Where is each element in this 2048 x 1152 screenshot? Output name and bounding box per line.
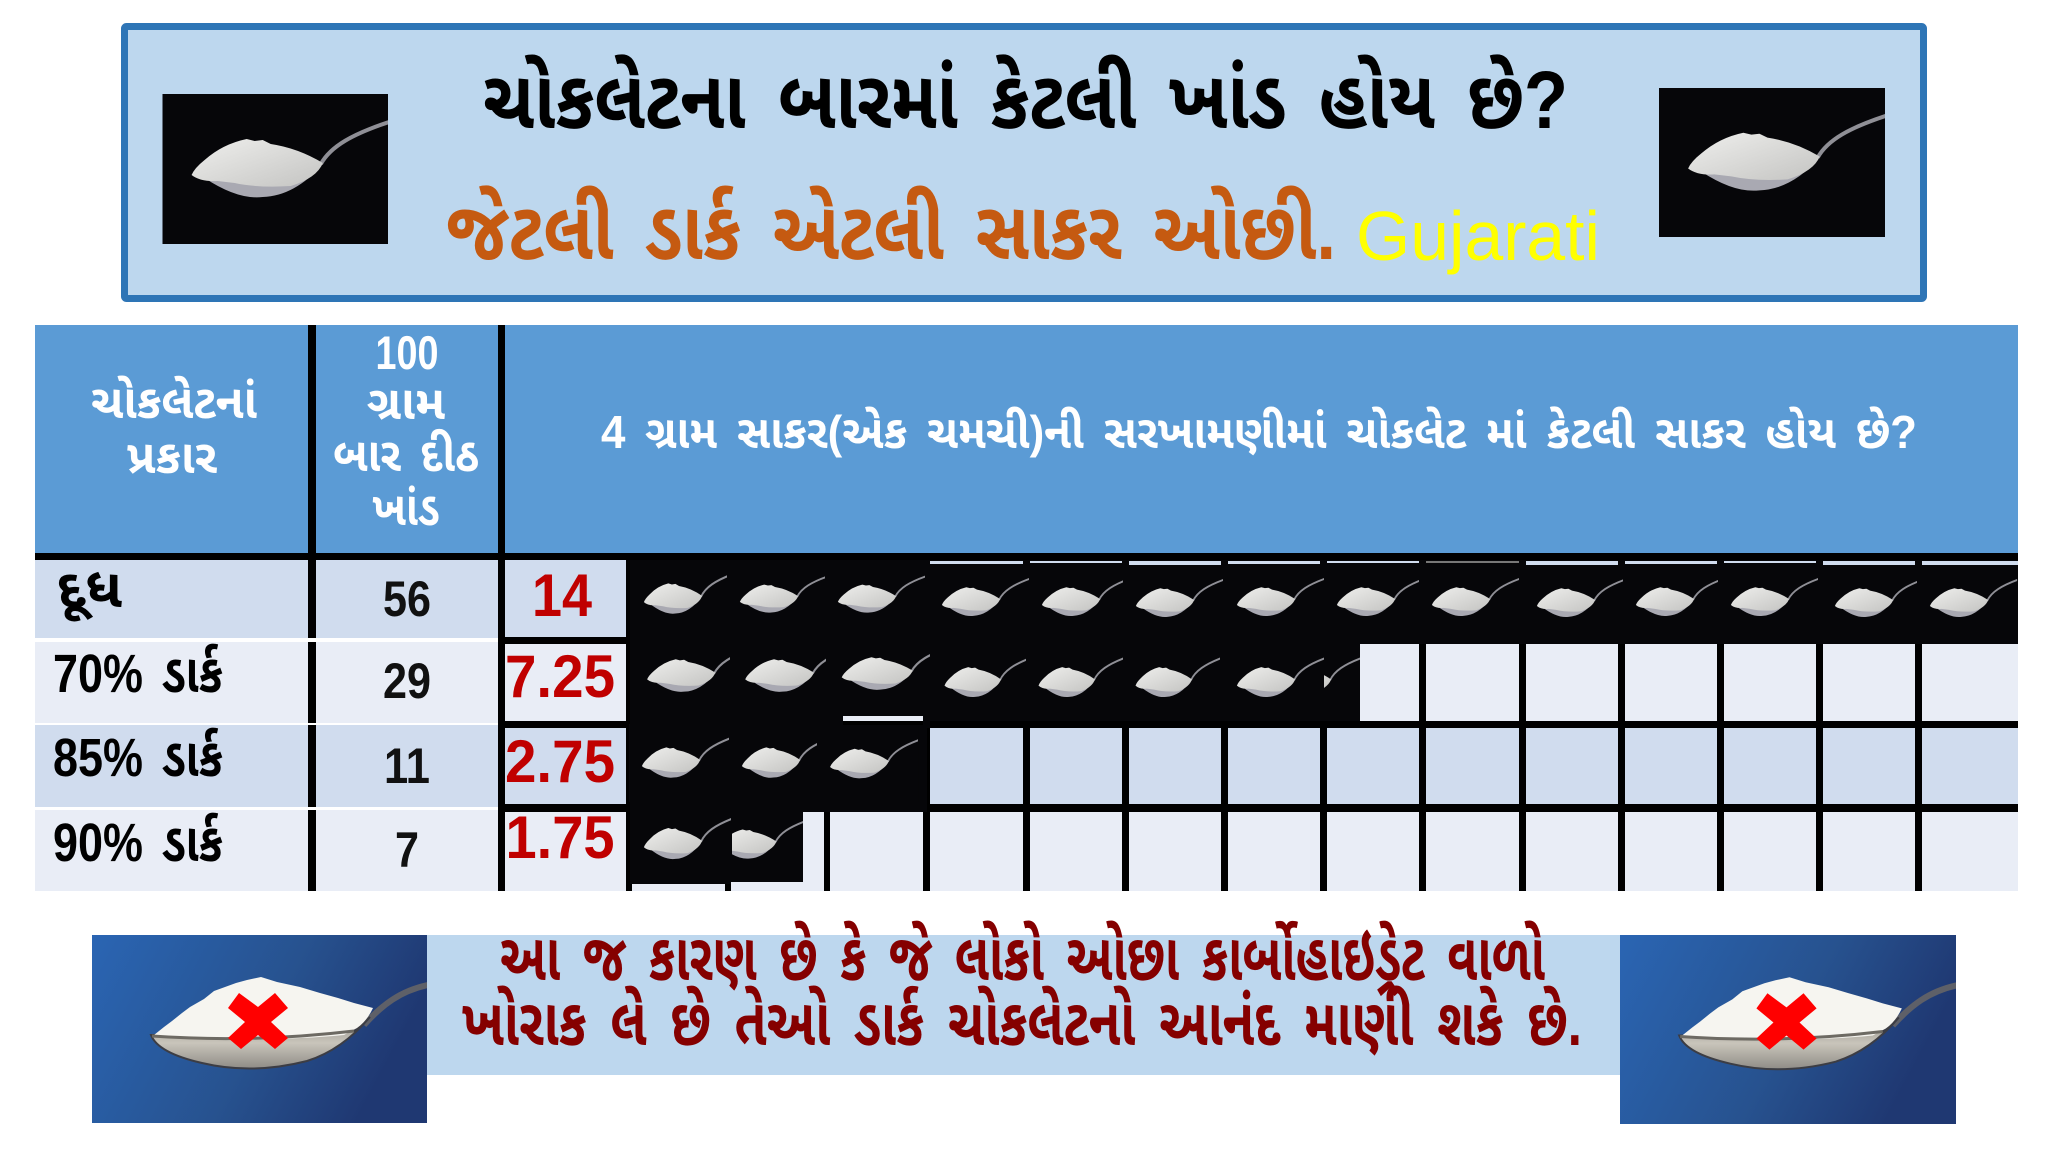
sugar comparison table bbox=[35, 325, 2018, 891]
row labels bbox=[53, 559, 223, 873]
icon: sugar spoon right bbox=[1659, 88, 1886, 237]
heading: chocolate type: પ્રકાર bbox=[127, 430, 218, 483]
sugar grams per 100 g: 56 bbox=[383, 571, 431, 627]
header panel bbox=[124, 26, 1924, 298]
message text bbox=[462, 920, 1582, 1059]
row labels: 85% ડાર્ક bbox=[53, 727, 223, 788]
heading: chocolate type bbox=[91, 375, 257, 483]
heading: comparison with 4 g sugar: 4 ગ્રામ સાકર(એક ચમચી)ની સરખામણીમાં ચોકલેટ માં કેટલી સાકર હોય છે? bbox=[601, 406, 1917, 458]
message text: આ જ કારણ છે કે જે લોકો ઓછા કાર્બોહાઇડ્રેટ વાળો bbox=[500, 920, 1546, 997]
heading: sugar per 100 g bar: ખાંડ bbox=[372, 482, 440, 535]
icon: sugar spoon left bbox=[162, 94, 389, 244]
row labels: 70% ડાર્ક bbox=[53, 643, 223, 704]
band bbox=[427, 935, 1620, 1075]
sugar grams per 100 g: 29 bbox=[383, 653, 431, 709]
heading: sugar per 100 g bar bbox=[333, 326, 479, 535]
row 3 spoons: 2.75 teaspoons bbox=[629, 724, 927, 812]
teaspoon counts: 2.75 bbox=[505, 728, 615, 795]
heading: sugar per 100 g bar: બાર દીઠ bbox=[333, 428, 479, 481]
icon: crossed sugar spoon left bbox=[92, 935, 428, 1123]
teaspoon counts bbox=[505, 562, 615, 871]
teaspoon counts: 1.75 bbox=[506, 804, 614, 871]
row 1 spoons: 14 teaspoons bbox=[630, 560, 2018, 644]
row 2 spoons: 7.25 teaspoons bbox=[630, 632, 1360, 728]
heading: sugar per 100 g bar: 100 bbox=[376, 326, 438, 379]
row labels: 90% ડાર્ક bbox=[53, 812, 223, 873]
bottom message bbox=[92, 920, 1957, 1124]
sugar grams per 100 g: 11 bbox=[384, 738, 430, 794]
teaspoon counts: 14 bbox=[532, 562, 593, 629]
language label: Gujarati bbox=[1356, 197, 1600, 275]
sugar grams per 100 g: 7 bbox=[395, 822, 419, 878]
row backgrounds bbox=[35, 325, 2018, 891]
icon: crossed sugar spoon right bbox=[1620, 935, 1957, 1124]
heading: sugar per 100 g bar: ગ્રામ bbox=[367, 376, 445, 429]
subtitle: જેટલી ડાર્ક એટલી સાકર ઓછી. bbox=[446, 184, 1336, 277]
sugar grams per 100 g bbox=[383, 571, 431, 878]
message text: ખોરાક લે છે તેઓ ડાર્ક ચોકલેટનો આનંદ માણી શકે છે. bbox=[462, 985, 1582, 1059]
row labels: દૂધ bbox=[57, 559, 122, 622]
title: ચોકલેટના બારમાં કેટલી ખાંડ હોય છે? bbox=[483, 53, 1568, 146]
row 4 spoons: 1.75 teaspoons bbox=[630, 804, 806, 884]
table header row bbox=[35, 325, 2018, 553]
heading: chocolate type: ચોકલેટનાં bbox=[91, 375, 257, 428]
teaspoon counts: 7.25 bbox=[505, 643, 615, 710]
